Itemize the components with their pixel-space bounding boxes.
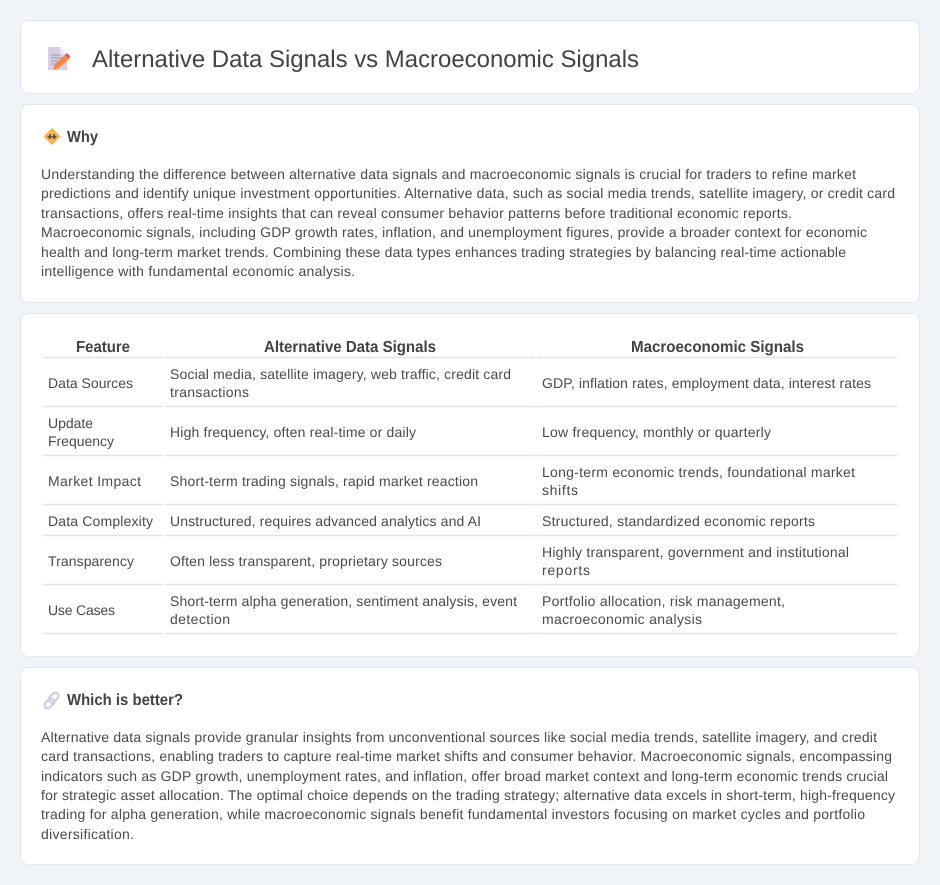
panel: header	[20, 20, 920, 94]
text block: why paragraph: Understanding the difference between alternative data signals and macroeconomic signals is crucial for traders to refine market	[41, 166, 856, 182]
text block: why paragraph: transactions, offers real-time insights that can reveal consumer behavior patterns before traditional economic reports.	[41, 205, 792, 221]
table header row: Alternative Data Signals	[264, 339, 436, 356]
row: data sources: Social media, satellite imagery, web traffic, credit card	[170, 366, 511, 382]
row: use cases: Portfolio allocation, risk management,	[542, 593, 785, 609]
text block: which is better paragraph: for strategic asset allocation. The optimal choice depends on the trading strategy; alternative data excels in short-term, high-frequency	[41, 787, 895, 803]
row: use cases: Short-term alpha generation, sentiment analysis, event	[170, 593, 517, 609]
text block: why paragraph: Macroeconomic signals, including GDP growth rates, inflation, and unemployment figures, provide a broader context for economic	[41, 224, 867, 240]
text block: why paragraph: intelligence with fundamental economic analysis.	[41, 263, 355, 279]
row: transparency	[48, 544, 849, 578]
row: update frequency: Low frequency, monthly or quarterly	[542, 424, 771, 440]
row: data complexity: Structured, standardized economic reports	[542, 513, 815, 529]
row: market impact: Market Impact	[48, 473, 141, 489]
text block: why paragraph: health and long-term market trends. Combining these data types enhances trading strategies by balancing real-time actionable	[41, 244, 846, 260]
row: update frequency: Update	[48, 415, 93, 431]
icon: link	[43, 691, 60, 710]
row: data sources: Data Sources	[48, 375, 133, 391]
text block: which is better paragraph: indicators such as GDP growth, unemployment rates, and inflation, offer broad market context and long-term economic trends crucial	[41, 768, 888, 784]
row: market impact: Long-term economic trends, foundational market	[542, 464, 855, 480]
panel: which is better	[20, 668, 920, 864]
row: transparency: Highly transparent, government and institutional	[542, 544, 849, 560]
heading: why: Why	[67, 129, 98, 146]
text block: which is better paragraph: diversification.	[41, 826, 134, 842]
row: update frequency: High frequency, often real-time or daily	[170, 424, 416, 440]
row: market impact: shifts	[542, 482, 578, 498]
heading: which is better: Which is better?	[67, 692, 183, 709]
row: update frequency: Frequency	[48, 433, 114, 449]
text block: why paragraph: predictions and identify unique investment opportunities. Alternative data, such as social media trends, satellite imagery, or credit card	[41, 185, 895, 201]
panel: why	[20, 104, 920, 302]
text block: which is better paragraph	[41, 729, 895, 842]
row: data sources: GDP, inflation rates, employment data, interest rates	[542, 375, 871, 391]
row: data sources	[48, 366, 871, 400]
row: market impact: Short-term trading signals, rapid market reaction	[170, 473, 478, 489]
row: data complexity	[48, 513, 815, 529]
title: Alternative Data Signals vs Macroeconomic Signals	[92, 46, 639, 73]
row: data complexity: Unstructured, requires advanced analytics and AI	[170, 513, 481, 529]
row: transparency: reports	[542, 562, 590, 578]
panel: comparison table	[20, 314, 920, 656]
text block: why paragraph	[41, 166, 895, 279]
table header row: Macroeconomic Signals	[631, 339, 804, 356]
row: update frequency	[48, 415, 771, 449]
row: data sources: transactions	[170, 384, 249, 400]
row: transparency: Transparency	[48, 553, 134, 569]
table header row	[76, 339, 804, 356]
row: transparency: Often less transparent, proprietary sources	[170, 553, 442, 569]
row: use cases: Use Cases	[48, 602, 115, 618]
table header row: Feature	[76, 339, 130, 356]
text block: which is better paragraph: Alternative data signals provide granular insights from unconventional sources like social media trends, satellite imagery, and credit	[41, 729, 877, 745]
text block: which is better paragraph: card transactions, enabling traders to capture real-time market shifts and consumer behavior. Macroeconomic signals, encompassing	[41, 748, 892, 764]
icon: document with pencil	[48, 47, 70, 70]
row: market impact	[48, 464, 855, 498]
text block: which is better paragraph: trading for alpha generation, while macroeconomic signals benefit fundamental investors focusing on market cycles and portfolio	[41, 806, 865, 822]
row: use cases	[48, 593, 785, 627]
row: use cases: macroeconomic analysis	[542, 611, 702, 627]
row: data complexity: Data Complexity	[48, 513, 153, 529]
icon: warning diamond	[44, 128, 60, 145]
row: use cases: detection	[170, 611, 230, 627]
